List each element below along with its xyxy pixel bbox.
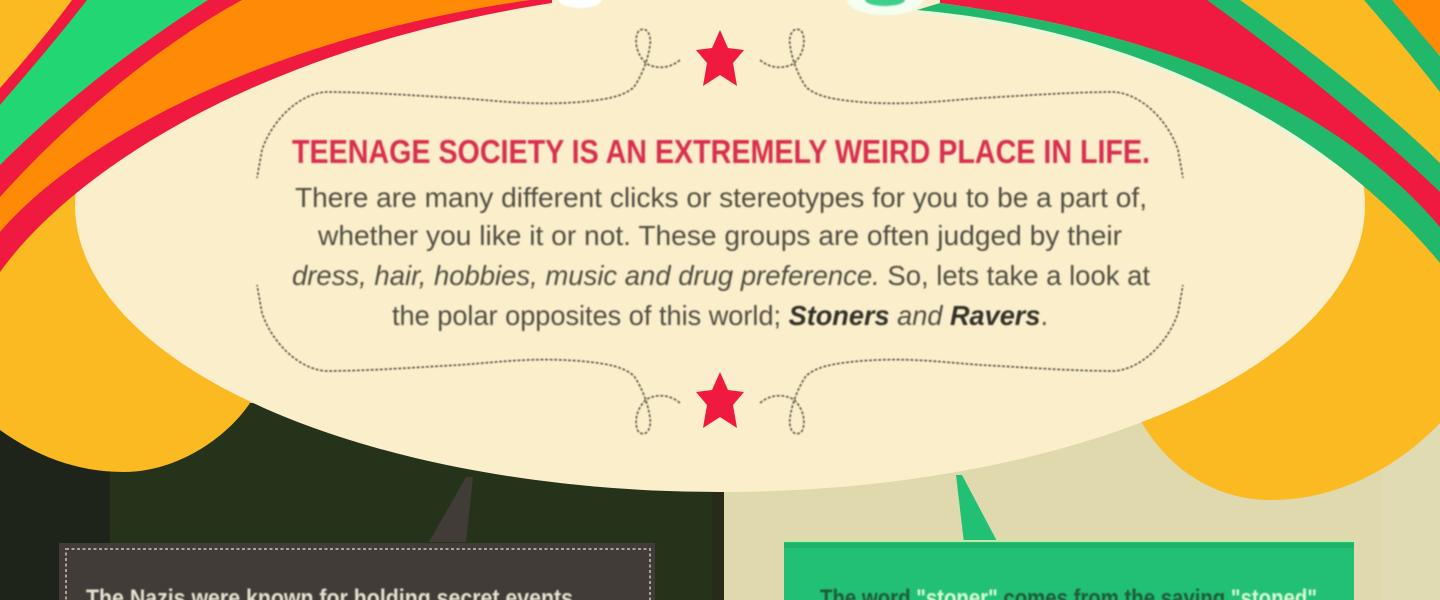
left yellow hair blob <box>0 60 300 472</box>
stripe: top-left red <box>0 0 88 107</box>
dashed flourish: top right <box>760 29 1183 178</box>
callout tail <box>956 475 998 543</box>
right callout: stoners <box>784 475 1354 600</box>
right rainbow stripes <box>917 0 1440 265</box>
intro body text <box>292 182 1150 331</box>
stripe: lower green halo <box>917 12 1440 265</box>
stripe: upper green <box>1205 0 1440 194</box>
background: right beige panel <box>724 0 1440 600</box>
callout box <box>59 543 655 600</box>
white and green spot: top right of centre <box>847 0 923 15</box>
stripe: lower green <box>917 3 1440 263</box>
dashed flourish: bottom right <box>760 285 1183 434</box>
bottom star <box>696 372 744 428</box>
callout dashed border <box>66 549 650 600</box>
intro body text: whether you like it or not. These groups are often judged by their <box>317 220 1122 251</box>
stripe: green <box>0 0 212 167</box>
stripe: top-left yellow corner <box>0 0 80 95</box>
central cream oval <box>75 0 1365 492</box>
stripe: top-right green <box>1364 0 1440 92</box>
intro heading: TEENAGE SOCIETY IS AN EXTREMELY WEIRD PLACE IN LIFE. <box>292 133 1150 170</box>
callout tail <box>429 477 473 542</box>
stripe: lower red <box>0 0 552 272</box>
left rainbow stripes <box>0 0 552 272</box>
intro body text: the polar opposites of this world; Stoners and Ravers. <box>392 300 1048 331</box>
stripe: main red <box>940 0 1440 229</box>
right yellow hair blob <box>1100 0 1440 500</box>
stripe: orange <box>0 0 532 234</box>
dashed flourish: top left <box>257 29 680 178</box>
background: left dark panel <box>0 0 724 600</box>
stripe: middle red <box>0 0 245 199</box>
white spot: top left of centre <box>558 0 602 8</box>
dashed flourish: bottom left <box>257 285 680 434</box>
intro body text: There are many different clicks or stereotypes for you to be a part of, <box>295 182 1147 213</box>
top star <box>696 30 744 86</box>
left callout: ravers <box>59 477 655 600</box>
callout box <box>784 541 1354 600</box>
intro body text: dress, hair, hobbies, music and drug preference. So, lets take a look at <box>292 260 1150 291</box>
stripe: top-right orange corner <box>1385 0 1440 55</box>
